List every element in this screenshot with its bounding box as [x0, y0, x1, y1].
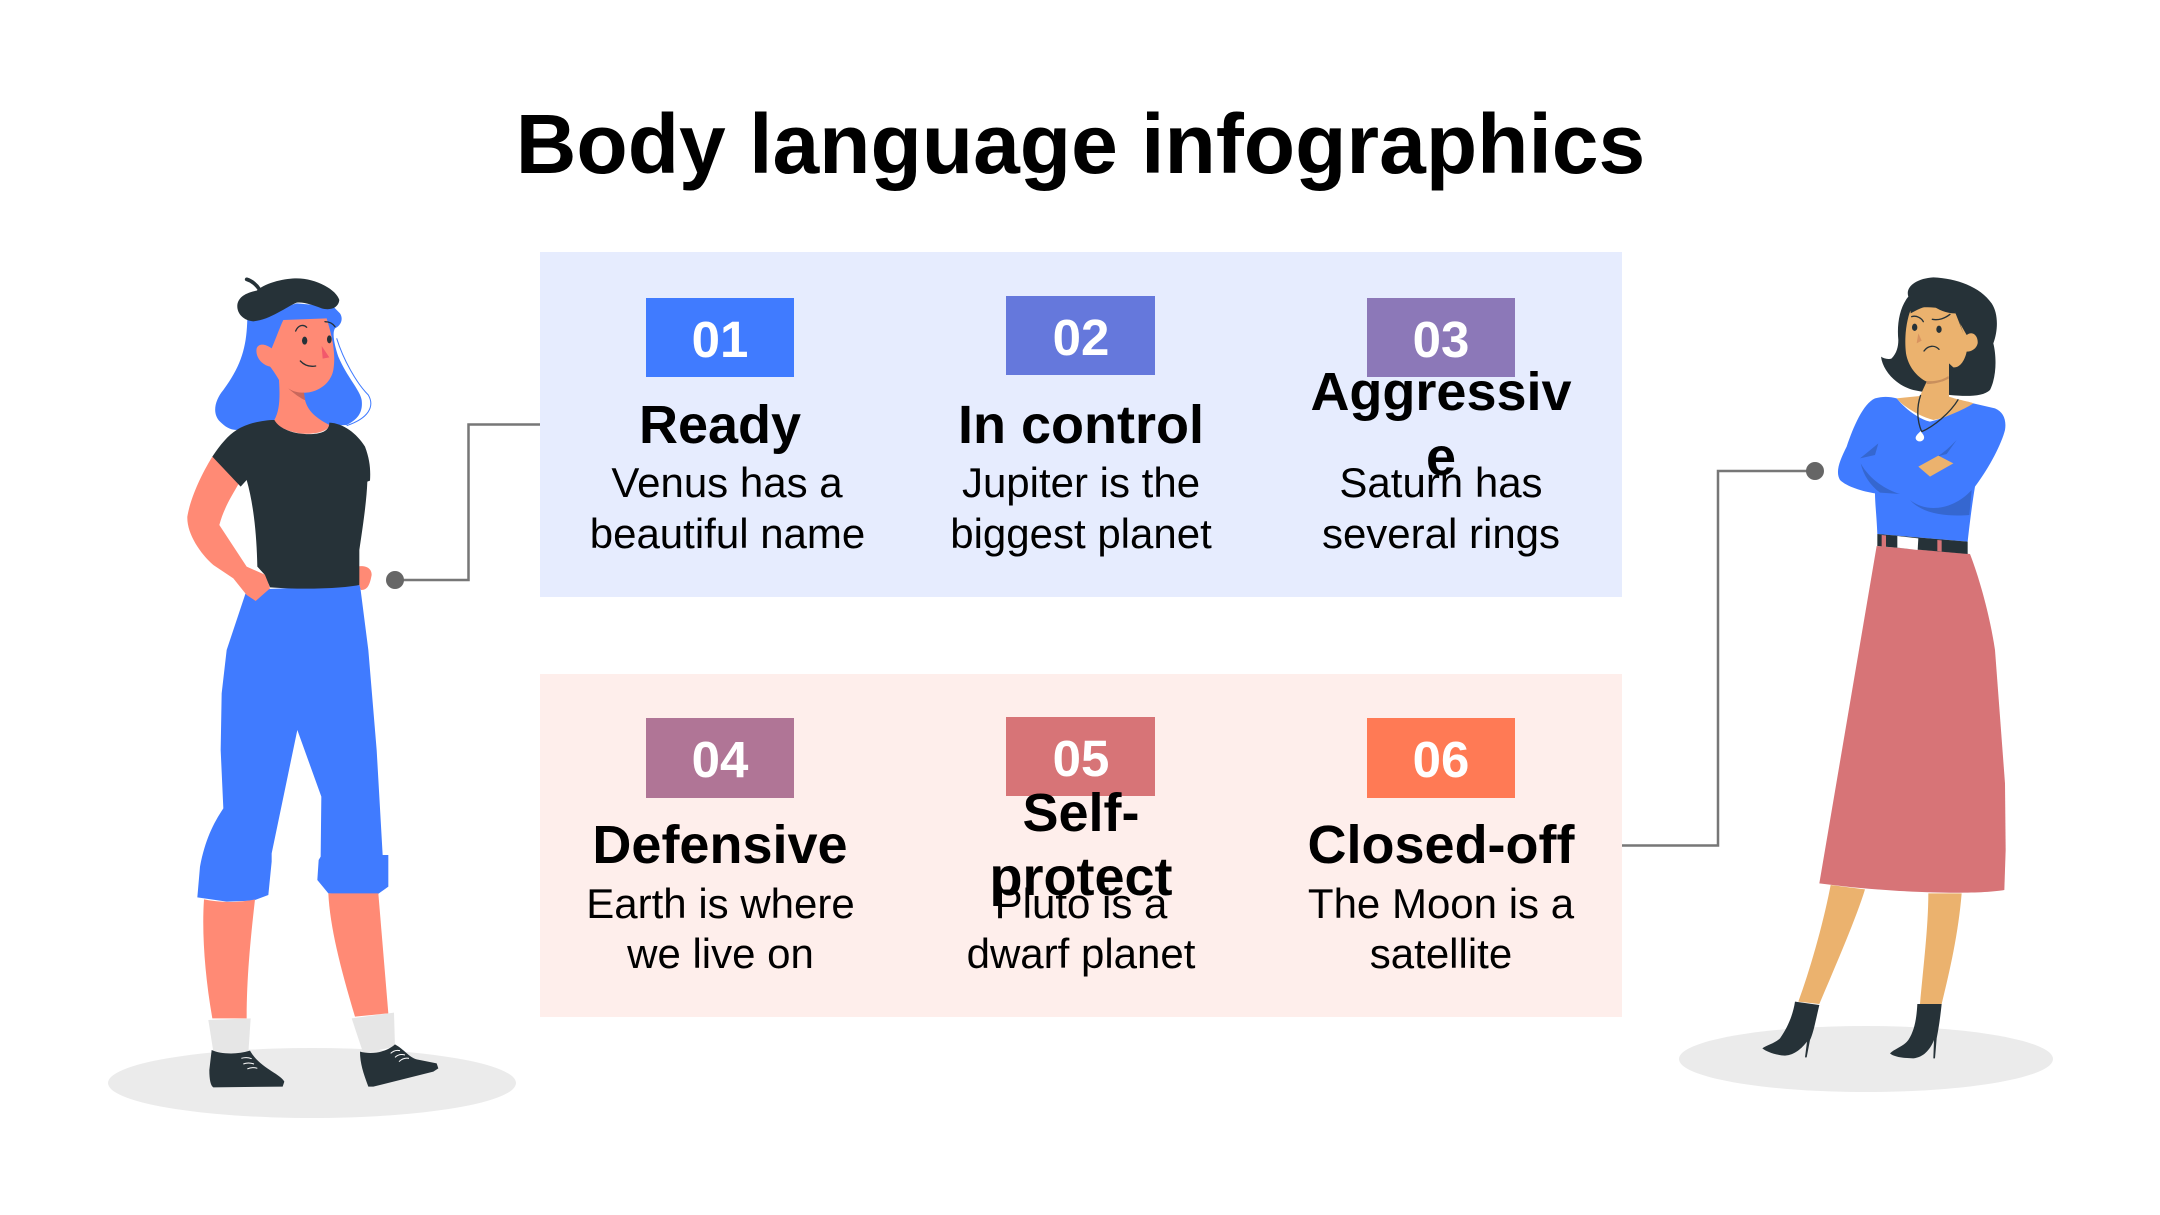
- connector: left figure to top panel: [386, 424, 540, 589]
- shadow: [1679, 1026, 2053, 1092]
- item 03: 03: [1413, 311, 1469, 368]
- item 06: [1308, 718, 1576, 977]
- hair: [1881, 277, 1997, 396]
- item 04: Earth is where: [586, 880, 855, 927]
- item 05: [967, 717, 1196, 977]
- sweater: [1838, 397, 2005, 542]
- item 05: dwarf planet: [967, 930, 1196, 977]
- item 01: Venus has a: [611, 459, 843, 506]
- item 05: Self-: [1022, 783, 1140, 843]
- item 02: Jupiter is the: [962, 459, 1200, 506]
- item 05: 05: [1053, 730, 1109, 787]
- hair: [215, 303, 362, 430]
- item 06: 06: [1413, 731, 1469, 788]
- beret: [247, 279, 259, 289]
- item 04: Defensive: [592, 815, 848, 875]
- item 04: [586, 718, 855, 977]
- face and neck: [256, 318, 334, 434]
- pants: [197, 585, 388, 902]
- item 02: biggest planet: [950, 510, 1212, 557]
- figure: woman with crossed arms: [1679, 277, 2053, 1092]
- item 01: 01: [692, 311, 748, 368]
- item 01: beautiful name: [590, 510, 865, 557]
- item 02: 02: [1053, 309, 1109, 366]
- item 02: In control: [958, 395, 1204, 455]
- necklace: [1918, 395, 1958, 432]
- shirt: [212, 420, 370, 589]
- arm and hand: [187, 457, 270, 601]
- item 05: protect: [989, 847, 1173, 907]
- shoes: [209, 1050, 284, 1087]
- item 01: Ready: [639, 395, 801, 455]
- item 02: [950, 296, 1212, 557]
- shadow: [108, 1048, 516, 1118]
- title: Body language infographics: [516, 97, 1645, 191]
- item 05: Pluto is a: [995, 880, 1168, 927]
- item 03: Saturn has: [1339, 459, 1543, 506]
- item 04: we live on: [626, 930, 814, 977]
- figure: woman with beret: [108, 278, 516, 1118]
- item 06: satellite: [1370, 930, 1512, 977]
- item 03: several rings: [1322, 510, 1560, 557]
- legs and boots: [1762, 885, 1962, 1058]
- item 04: 04: [692, 731, 749, 788]
- socks: [208, 1018, 251, 1053]
- skirt: [1819, 546, 2006, 893]
- item 01: [590, 298, 865, 557]
- legs: [203, 899, 255, 1018]
- panel: bottom row: [540, 674, 1622, 1017]
- hand: [1918, 456, 1953, 477]
- item 03: e: [1426, 427, 1456, 487]
- item 06: The Moon is a: [1308, 880, 1575, 927]
- item 03: [1310, 298, 1572, 557]
- item 03: Aggressiv: [1310, 362, 1572, 422]
- item 06: Closed-off: [1308, 815, 1576, 875]
- belt: [1877, 534, 1968, 554]
- face and neck: [1897, 307, 1978, 420]
- connector: right figure to bottom panel: [1622, 462, 1824, 846]
- panel: top row: [540, 252, 1622, 597]
